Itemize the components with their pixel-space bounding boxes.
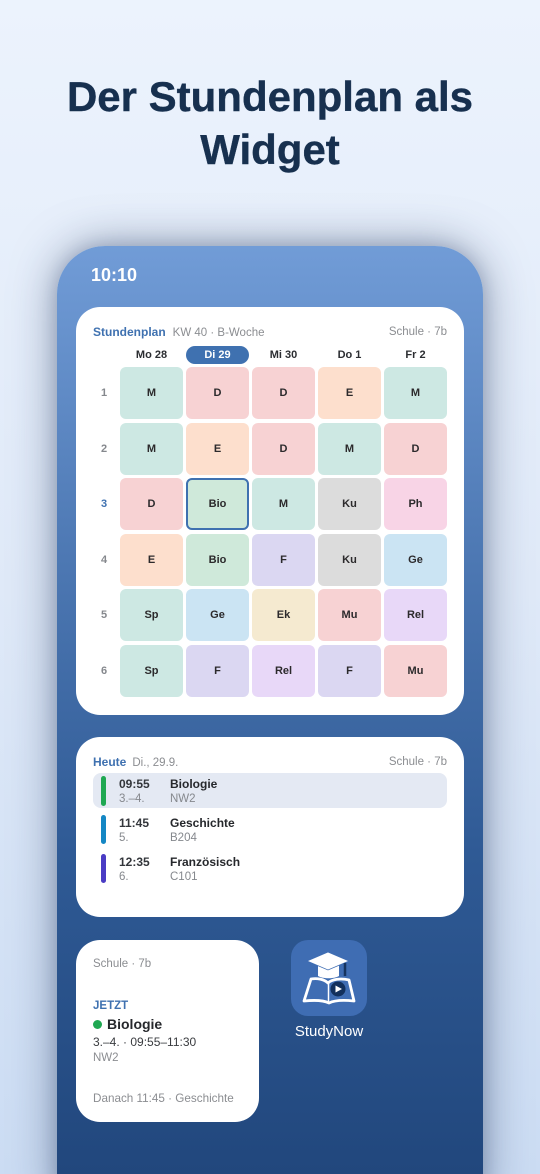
icon: StudyNow app (291, 940, 367, 1016)
current time: 3.–4. · 09:55–11:30 (93, 1035, 196, 1049)
timetable grid: M (147, 387, 156, 399)
timetable grid: D (280, 387, 287, 399)
timetable grid: Mi 30 (270, 349, 297, 361)
timetable grid: M (411, 387, 420, 399)
title (67, 73, 473, 173)
timetable grid: Di 29 (204, 349, 231, 361)
timetable grid: D (214, 387, 221, 399)
timetable grid: Ph (408, 498, 423, 510)
today heading (93, 755, 447, 769)
lesson highlight row (93, 773, 447, 808)
timetable grid: Fr 2 (405, 349, 426, 361)
current subject: Biologie (107, 1016, 162, 1032)
next lesson: Danach 11:45 · Geschichte (93, 1092, 234, 1105)
timetable grid: 5 (101, 609, 107, 621)
timetable grid: E (148, 554, 155, 566)
timetable heading (93, 325, 447, 339)
lesson: Biologie: NW2 (170, 793, 196, 805)
title: Widget (200, 126, 340, 173)
class label: Schule · 7b (93, 958, 151, 970)
timetable grid: Rel (275, 665, 292, 677)
timetable grid: D (280, 443, 287, 455)
timetable grid: Rel (407, 609, 424, 621)
timetable grid: 3 (101, 498, 107, 510)
timetable grid: E (346, 387, 353, 399)
timetable grid: Sp (144, 609, 159, 621)
lesson: Biologie: Biologie (170, 777, 217, 791)
lesson: Biologie (101, 776, 217, 806)
room: NW2 (93, 1052, 119, 1064)
timetable grid: Bio (209, 554, 226, 566)
timetable grid: 1 (101, 387, 107, 399)
now label: JETZT (93, 1000, 128, 1012)
timetable grid: Ku (342, 554, 357, 566)
status bar time: 10:10 (91, 265, 137, 285)
timetable grid: D (148, 498, 155, 510)
timetable grid: F (280, 554, 287, 566)
timetable grid: M (147, 443, 156, 455)
lesson: Französisch (101, 854, 240, 883)
timetable grid: D (412, 443, 419, 455)
today heading: Schule · 7b (389, 756, 447, 768)
timetable grid: Mu (342, 609, 357, 621)
lesson: Französisch: Französisch (170, 855, 240, 869)
timetable grid: M (279, 498, 288, 510)
timetable grid: Sp (144, 665, 159, 677)
timetable grid: Ge (210, 609, 225, 621)
timetable heading: Schule · 7b (389, 326, 447, 338)
timetable grid: Ek (277, 609, 290, 621)
lesson: Französisch: C101 (170, 871, 198, 883)
timetable grid: Ku (342, 498, 357, 510)
timetable heading: Stundenplan KW 40 · B-Woche (93, 325, 264, 339)
today heading: Heute Di., 29.9. (93, 755, 178, 769)
title: Der Stundenplan als (67, 73, 473, 120)
panel: today widget (76, 737, 464, 917)
timetable grid: Do 1 (338, 349, 361, 361)
timetable grid: Ge (408, 554, 423, 566)
timetable grid: Mo 28 (136, 349, 167, 361)
lesson: Geschichte: 11:45 (119, 816, 149, 830)
lesson: Geschichte: 5. (119, 832, 129, 844)
lesson: Französisch: 6. (119, 871, 129, 883)
timetable grid: F (214, 665, 221, 677)
panel: timetable widget (76, 307, 464, 715)
timetable grid: Bio (209, 498, 226, 510)
timetable grid: M (345, 443, 354, 455)
lesson: Biologie: 3.–4. (119, 793, 145, 805)
timetable grid: E (214, 443, 221, 455)
timetable grid: Mu (408, 665, 423, 677)
lesson: Geschichte (101, 815, 235, 844)
lesson: Französisch: 12:35 (119, 855, 150, 869)
timetable grid: 4 (101, 554, 107, 566)
lesson: Geschichte: Geschichte (170, 816, 235, 830)
lesson: Geschichte: B204 (170, 832, 197, 844)
panel: now widget (76, 940, 259, 1122)
phone (57, 246, 483, 1174)
lesson: Biologie: 09:55 (119, 777, 150, 791)
timetable grid: 2 (101, 443, 107, 455)
timetable grid: 6 (101, 665, 107, 677)
timetable grid: F (346, 665, 353, 677)
app label: StudyNow (295, 1023, 363, 1040)
